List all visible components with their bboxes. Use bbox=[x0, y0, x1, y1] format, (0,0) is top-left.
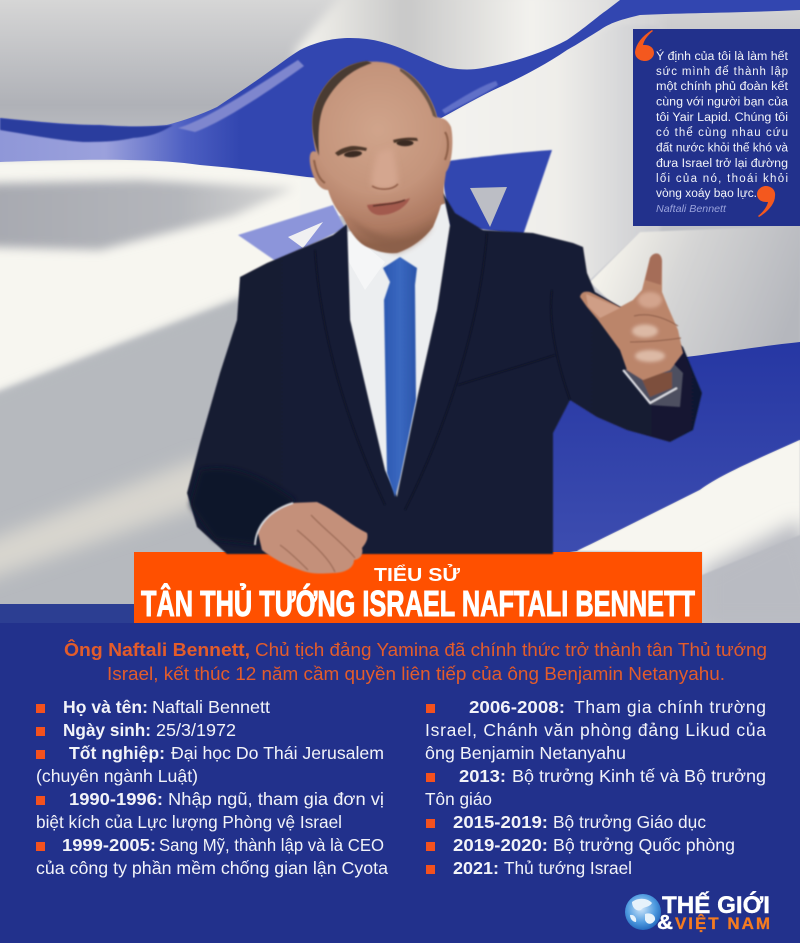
suit jacket bbox=[187, 193, 702, 554]
right column: political career: Bộ trưởng Giáo dục bbox=[553, 812, 706, 832]
subtitle: TIỂU SỬ bbox=[374, 564, 461, 585]
quote text: Ý định của tôi là làm hết bbox=[656, 50, 789, 63]
quote text: vòng xoáy bạo lực. bbox=[656, 188, 757, 200]
mouth bbox=[367, 198, 410, 215]
left column: personal details and career: Ngày sinh: bbox=[63, 720, 151, 740]
intro text: Ông Naftali Bennett, bbox=[64, 639, 250, 660]
quote text: đưa Israel trở lại đường bbox=[656, 158, 788, 170]
right column: political career: ông Benjamin Netanyahu bbox=[425, 743, 626, 763]
quote attribution: Naftali Bennett bbox=[656, 203, 727, 215]
right column: political career: Bộ trưởng Kinh tế và Bộ trưởng bbox=[512, 766, 766, 786]
intro text bbox=[64, 639, 767, 684]
globe icon bbox=[625, 894, 661, 930]
shirt bbox=[347, 203, 450, 490]
right column: political career: 2006-2008: bbox=[469, 697, 565, 717]
blue lower stripe bbox=[540, 342, 800, 556]
neck bbox=[340, 175, 448, 262]
right column: political career: Tham gia chính trường bbox=[574, 697, 766, 717]
quote text: đất nước khỏi thế khó và bbox=[656, 142, 789, 154]
star of David fragments bbox=[440, 150, 552, 235]
right column: political career: 2021: bbox=[453, 858, 499, 878]
intro text: Israel, kết thúc 12 năm cầm quyền liên tiếp của ông Benjamin Netanyahu. bbox=[107, 663, 725, 684]
white sliver beside the ear bbox=[300, 178, 345, 222]
left column: personal details and career: Naftali Bennett bbox=[152, 697, 270, 717]
portrait: Naftali Bennett bbox=[187, 61, 702, 574]
right column: political career: 2015-2019: bbox=[453, 812, 548, 832]
quote text: có thể cùng nhau cứu bbox=[656, 127, 788, 139]
right column: political career bbox=[425, 697, 766, 878]
left column: personal details and career bbox=[36, 697, 388, 878]
white lower fold bbox=[577, 440, 800, 575]
right column: political career: 2019-2020: bbox=[453, 835, 548, 855]
quote text: lối của nó, thoái khỏi bbox=[656, 173, 788, 185]
blue upper stripe bbox=[0, 0, 800, 180]
title banner bbox=[134, 552, 702, 624]
right column: political career: Israel, Chánh văn phòng đảng Likud của bbox=[425, 720, 766, 740]
left column: personal details and career: biệt kích của Lực lượng Phòng vệ Israel bbox=[36, 812, 342, 832]
eyebrows bbox=[335, 146, 367, 156]
logo: Thế Giới & Việt Nam: THẾ GIỚI bbox=[662, 891, 770, 919]
chin shadow bbox=[345, 215, 433, 253]
quote text: một chính phủ đoàn kết bbox=[656, 81, 789, 93]
quote text: cùng với người bạn của bbox=[656, 96, 789, 108]
logo: Thế Giới & Việt Nam: VIỆT NAM bbox=[675, 914, 770, 933]
pointing hand bbox=[580, 253, 683, 407]
left column: personal details and career: (chuyên ngành Luật) bbox=[36, 766, 198, 786]
left column: personal details and career: Nhập ngũ, tham gia đơn vị bbox=[168, 789, 384, 809]
left column: personal details and career: Tốt nghiệp: bbox=[69, 743, 165, 763]
ear shade bbox=[314, 160, 325, 183]
right column: political career: 2013: bbox=[459, 766, 506, 786]
left column: personal details and career: Đại học Do Thái Jerusalem bbox=[171, 743, 384, 763]
intro text: Chủ tịch đảng Yamina đã chính thức trở thành tân Thủ tướng bbox=[255, 639, 767, 660]
right column: political career: Thủ tướng Israel bbox=[504, 858, 632, 878]
right column: political career: Bộ trưởng Quốc phòng bbox=[553, 835, 735, 855]
quote text: sức mình để thành lập bbox=[656, 66, 788, 78]
resting hand bbox=[255, 502, 367, 574]
logo: Thế Giới & Việt Nam bbox=[625, 891, 770, 934]
left column: personal details and career: của công ty phần mềm chống gian lận Cyota bbox=[36, 858, 388, 878]
logo: Thế Giới & Việt Nam: & bbox=[657, 912, 673, 934]
opening quotation mark bbox=[635, 30, 654, 61]
left column: personal details and career: 1999-2005: bbox=[62, 835, 156, 855]
left column: personal details and career: Sang Mỹ, thành lập và là CEO bbox=[159, 835, 384, 855]
left column: personal details and career: 1990-1996: bbox=[69, 789, 163, 809]
background: waving Israeli flag bbox=[0, 0, 800, 625]
blue strip at bottom left bbox=[0, 604, 140, 624]
quote text: tôi Yair Lapid. Chúng tôi bbox=[656, 112, 788, 124]
closing quotation mark bbox=[757, 186, 775, 217]
quote text bbox=[656, 50, 789, 200]
tie bbox=[383, 257, 417, 497]
hair bbox=[312, 61, 372, 156]
nose bbox=[371, 148, 398, 190]
head bbox=[310, 62, 452, 253]
eyes bbox=[344, 150, 362, 158]
left column: personal details and career: Họ và tên: bbox=[63, 697, 148, 717]
panel: biography bbox=[0, 623, 800, 943]
left column: personal details and career: 25/3/1972 bbox=[156, 720, 236, 740]
quote box bbox=[633, 29, 800, 226]
jacket lapels and creases bbox=[315, 233, 570, 510]
right column: political career: Tôn giáo bbox=[425, 789, 492, 809]
